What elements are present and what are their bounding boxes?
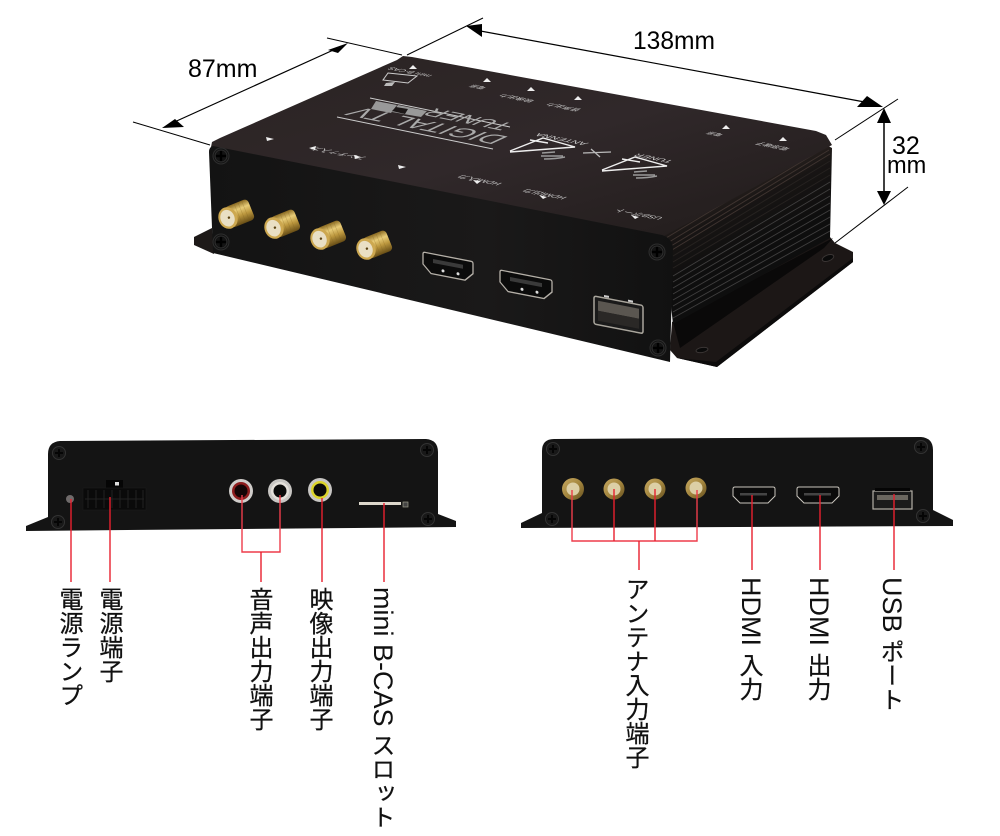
HDMI output port — [797, 487, 839, 503]
printed port labels: ANTENNA — [532, 132, 591, 146]
front face — [209, 146, 673, 362]
gold antenna connectors — [215, 198, 393, 263]
panel: front view of tuner — [521, 437, 953, 570]
product photo: tuner box in perspective — [194, 56, 853, 367]
top legend: DIGITAL TV TUNER: DIGITAL TV — [338, 104, 515, 147]
leader lines: rear — [71, 495, 384, 582]
top face printing — [266, 65, 793, 221]
dimension: length 138mm: 138mm — [633, 28, 715, 55]
label: mini B-CAS slot: mini B-CAS スロット — [367, 587, 398, 829]
RCA jack white — [268, 479, 292, 503]
label: USB port: USB ポート — [876, 577, 907, 711]
RCA jack yellow — [308, 478, 332, 502]
screws on front face — [213, 148, 666, 356]
HDMI port 1 — [423, 252, 473, 282]
USB port — [873, 488, 912, 509]
mini B-CAS slot — [359, 502, 408, 507]
rear body and flanges — [26, 439, 456, 531]
logo: antenna 4 — [510, 138, 575, 159]
label: audio output terminal: 音声出力端子 — [245, 587, 272, 731]
power lamp — [66, 495, 74, 503]
HDMI input port — [733, 487, 775, 503]
printed port labels: HDMI入力 — [454, 174, 504, 187]
dimension: height 32mm — [835, 108, 926, 243]
label: HDMI input: HDMI 入力 — [735, 577, 766, 701]
power connector — [83, 480, 146, 510]
printed port labels: 電源端子 — [752, 141, 793, 151]
printed port labels: 電源 — [467, 84, 489, 90]
dimension: length 138mm — [407, 18, 898, 140]
leader lines: front — [572, 489, 894, 570]
printed port labels: TUNER — [631, 153, 676, 164]
front body and flanges — [521, 437, 953, 528]
dimension: height 32mm: 32 — [892, 132, 920, 160]
printed port labels: HDMI出力 — [519, 188, 569, 201]
side face with ribs — [663, 140, 832, 324]
top legend: DIGITAL TV TUNER: TUNER — [417, 106, 519, 132]
front screws — [546, 440, 930, 526]
USB port — [594, 293, 643, 334]
top face — [211, 56, 832, 236]
printed port labels: 電源 — [704, 131, 726, 137]
panel: rear view of tuner — [26, 439, 456, 582]
label: HDMI output: HDMI 出力 — [803, 577, 834, 701]
dimension: height 32mm: mm — [887, 153, 926, 179]
printed port labels: mini B-CAS — [385, 66, 434, 78]
dimension: width 87mm — [133, 38, 402, 145]
label: antenna input terminal: アンテナ入力端子 — [621, 577, 648, 769]
printed port labels — [266, 65, 793, 221]
printed port labels: アンテナ入力 — [306, 146, 370, 161]
right mounting flange — [670, 237, 853, 367]
logo: times sign — [583, 149, 611, 157]
printed port labels: 音声出力 — [543, 102, 584, 112]
printed port labels: 映像出力 — [496, 93, 537, 103]
left mounting flange — [194, 228, 214, 254]
label: video output terminal: 映像出力端子 — [305, 587, 332, 731]
label: power terminal: 電源端子 — [95, 587, 122, 683]
rear screws — [52, 444, 434, 528]
logo: tuner 4 — [602, 157, 667, 178]
dimension: width 87mm: 87mm — [188, 55, 257, 83]
antenna connectors — [562, 478, 706, 500]
label: power lamp: 電源ランプ — [55, 587, 82, 707]
printed port labels: USBポート — [611, 208, 665, 221]
RCA jack red — [229, 479, 253, 503]
HDMI port 2 — [500, 270, 552, 300]
